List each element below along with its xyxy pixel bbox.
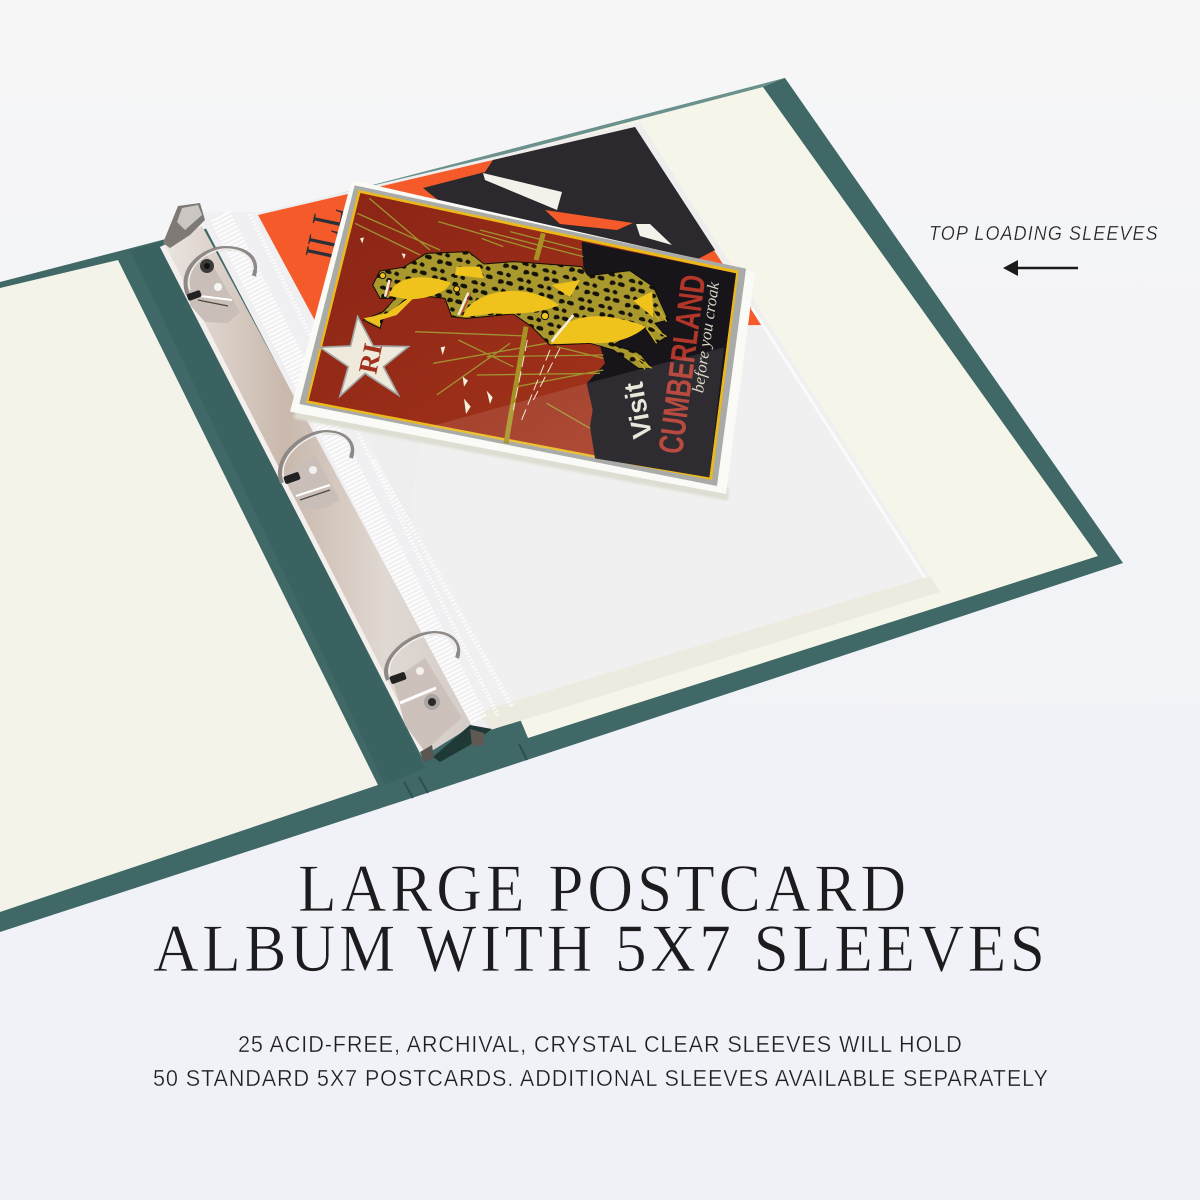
RI star badge: RI	[353, 341, 388, 376]
title: ALBUM WITH 5X7 SLEEVES	[153, 911, 1045, 987]
description text: 25 ACID-FREE, ARCHIVAL, CRYSTAL CLEAR SLEEVES WILL HOLD	[238, 1031, 962, 1057]
birds	[360, 237, 493, 414]
metal ring plate	[160, 226, 472, 757]
back postcard in sleeve	[258, 127, 762, 330]
RI star badge	[320, 317, 408, 396]
title: LARGE POSTCARD	[298, 851, 906, 927]
poster lettering: ILL	[297, 201, 354, 264]
ring 2	[280, 432, 352, 510]
postcard lettering: Visit	[618, 380, 658, 441]
description text: 50 STANDARD 5X7 POSTCARDS. ADDITIONAL SLEEVES AVAILABLE SEPARATELY	[153, 1065, 1048, 1091]
postcard lettering: before you croak	[688, 280, 723, 394]
reeds	[355, 198, 603, 428]
binder: open green cover with pages, ring mechanism and sleeve	[0, 78, 1123, 932]
title	[153, 851, 1045, 987]
clear sleeve	[198, 122, 940, 730]
ring 3	[386, 633, 484, 762]
postcard lettering: CUMBERLAND	[652, 273, 713, 456]
left cream page	[0, 260, 378, 912]
ring 1	[163, 203, 255, 323]
postcard art	[309, 193, 736, 477]
postcard: Visit Cumberland frogs	[290, 180, 755, 501]
arrow pointing to sleeve	[1003, 260, 1078, 276]
description text	[153, 1031, 1048, 1091]
green cloth cover	[0, 78, 1123, 932]
perforated strip	[220, 214, 498, 722]
callout: top loading sleeves: TOP LOADING SLEEVES	[929, 223, 1158, 245]
frog group	[363, 252, 668, 369]
sleeve pocket glare	[430, 347, 724, 477]
lower sleeve pocket	[410, 310, 940, 730]
postcard lettering	[618, 273, 723, 456]
right cream page	[280, 87, 1098, 738]
